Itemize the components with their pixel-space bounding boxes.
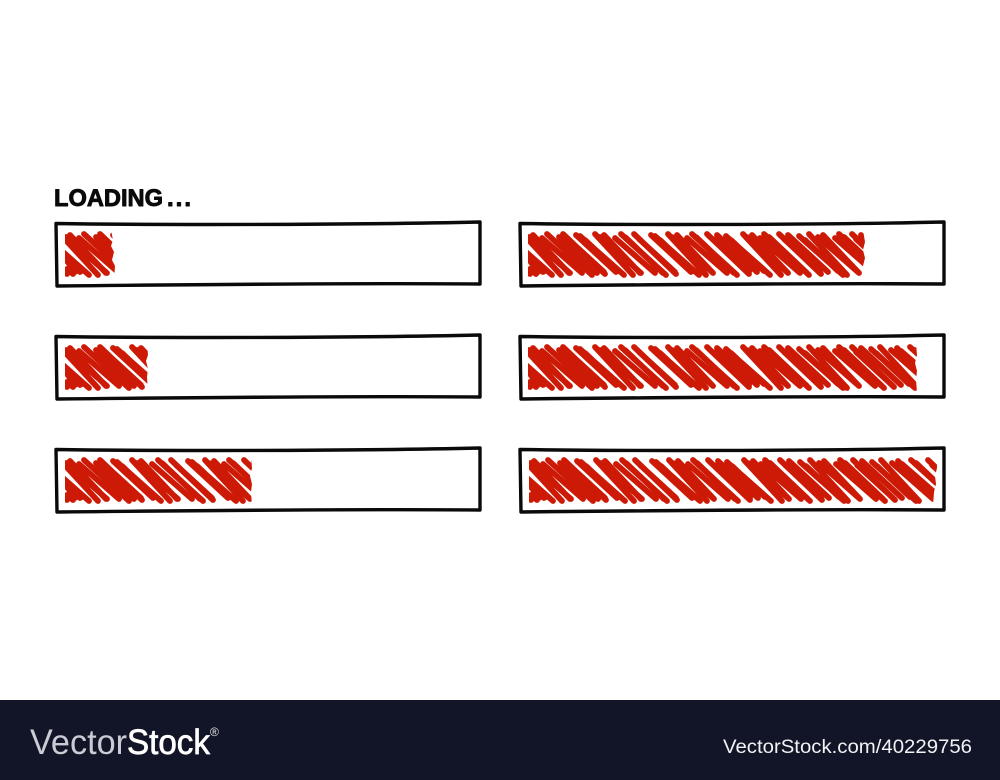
progress bar 6: about 98 percent — [477, 448, 970, 512]
footer logo — [30, 723, 219, 762]
footer logo: Stock — [127, 723, 210, 762]
heading: loading: ... — [167, 185, 191, 212]
progress bar 5: about 93 percent — [476, 335, 969, 399]
heading: loading: LOADING — [54, 185, 163, 212]
footer logo: Vector — [30, 723, 127, 762]
footer band — [0, 700, 1000, 780]
footer image id: VectorStock.com/40229756 — [723, 737, 972, 758]
progress bar 3: about 45 percent — [13, 448, 506, 512]
progress bar 1: about 10 percent — [13, 222, 506, 286]
footer logo: ® — [210, 725, 219, 739]
progress bar 4: about 80 percent — [476, 222, 969, 286]
progress bar 2: about 20 percent — [13, 335, 506, 399]
infographic canvas — [0, 188, 1000, 780]
